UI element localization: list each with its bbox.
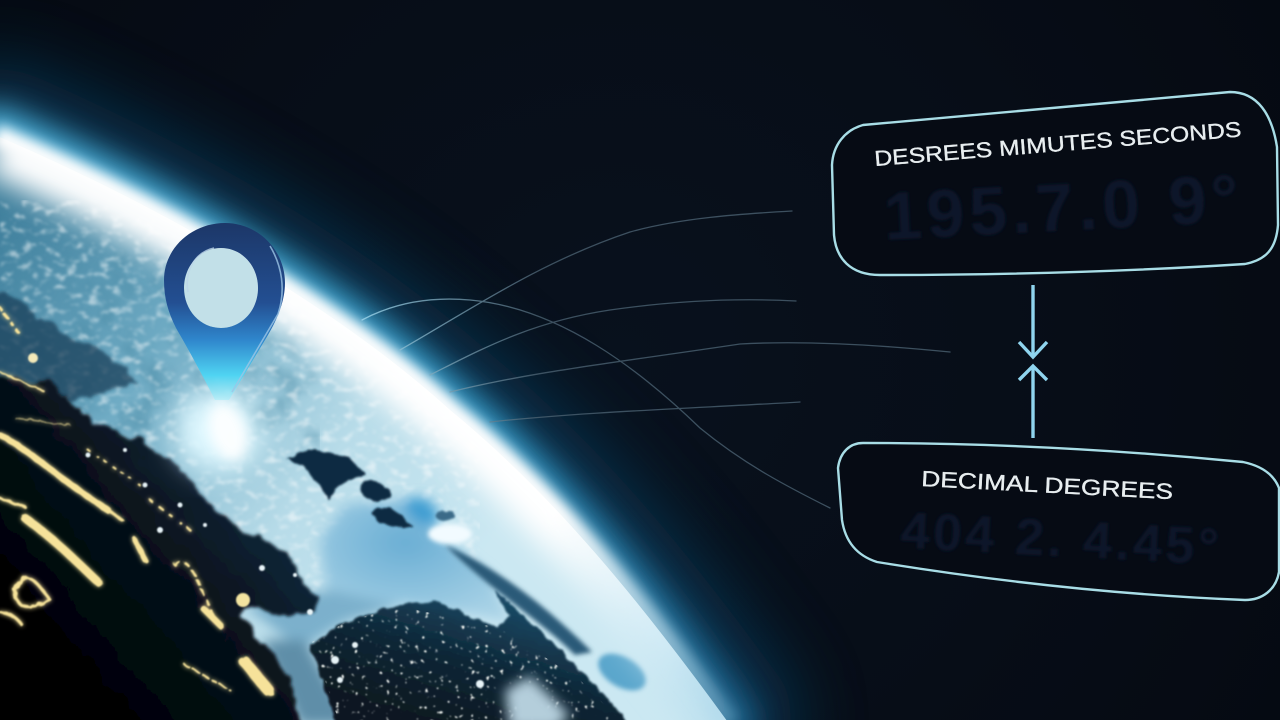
connector lines (362, 211, 950, 508)
box outline (832, 92, 1278, 275)
pin body (164, 223, 285, 400)
city light speckle: lower continent (312, 609, 609, 720)
panel: degrees minutes seconds (832, 92, 1278, 275)
arrow: down (1019, 285, 1047, 357)
scattered white city lights (28, 353, 484, 688)
pin edge highlight (232, 246, 282, 392)
faint value: 195.7.0 9° (882, 161, 1240, 255)
golden city lights (0, 308, 268, 690)
lens rim highlight (187, 248, 214, 292)
ocean and cloud surface (0, 130, 740, 720)
pale patch on lower land (505, 676, 570, 720)
coastal lens of water (595, 650, 648, 694)
dark lower continent (310, 592, 640, 720)
dark coastal arm (445, 545, 592, 655)
limb core (0, 135, 730, 720)
pin lens (184, 248, 258, 328)
location pin (164, 223, 285, 400)
faint value: 404 2. 4.45° (899, 502, 1220, 577)
pin base flare (174, 388, 262, 472)
bright limb (0, 150, 730, 720)
cloud texture (0, 200, 480, 600)
box outline (838, 443, 1279, 600)
atmosphere glow (0, 130, 730, 720)
dark shadow band (0, 285, 135, 400)
dark cloud gaps (81, 260, 320, 450)
globe (0, 130, 740, 720)
arrow: up (1019, 366, 1047, 438)
dark night continent (0, 372, 322, 720)
box heading: DECIMAL DEGREES (921, 466, 1174, 504)
water areas (245, 497, 510, 720)
panel: decimal degrees (838, 443, 1279, 600)
white cloud patch on the coast (428, 524, 472, 544)
islands and lakes (288, 451, 454, 526)
box heading: DESREES MIMUTES SECONDS (873, 118, 1242, 171)
